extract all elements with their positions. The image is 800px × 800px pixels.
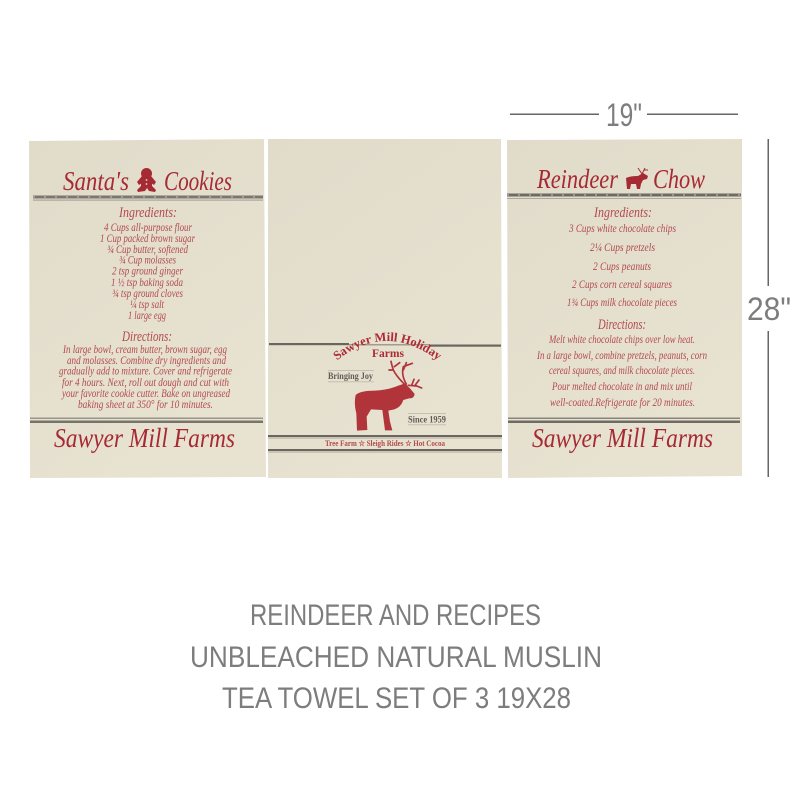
text: ingredients list: 3 Cups white chocolate chips — [568, 221, 676, 235]
text: ingredients list: 2 Cups peanuts — [593, 259, 651, 273]
text: ingredients list: ¾ tsp ground cloves — [112, 288, 183, 300]
title: product name: UNBLEACHED NATURAL MUSLIN — [190, 641, 602, 674]
text: directions: In large bowl, cream butter, brown sugar, egg — [62, 344, 227, 356]
text: directions: for 4 hours. Next, roll out dough and cut with — [62, 377, 229, 389]
panel: Reindeer Chow towel — [507, 139, 742, 478]
text: ingredients list: 2 Cups corn cereal squares — [572, 277, 672, 291]
heading: Reindeer Chow — [536, 164, 705, 194]
icon: gingerbread man — [137, 168, 156, 192]
dimension: height 28 inches: 28" — [747, 291, 791, 327]
title: product name: REINDEER AND RECIPES — [250, 599, 541, 632]
text: directions: and molasses. Combine dry ingredients and — [67, 355, 226, 367]
heading: Santa's Cookies: Santa's — [63, 166, 129, 196]
icon: small reindeer — [626, 168, 648, 189]
heading: Santa's Cookies: Cookies — [164, 166, 232, 196]
stripes: upper band — [269, 343, 501, 347]
text: ingredients list: 2 tsp ground ginger — [112, 266, 183, 278]
stripes: lower bands — [268, 435, 502, 452]
panel: reindeer towel — [268, 139, 502, 478]
stripes: bottom woven band — [30, 418, 263, 423]
text: directions: well-coated.Refrigerate for 20 minutes. — [550, 395, 695, 409]
text: directions: In a large bowl, combine pretzels, peanuts, corn — [536, 348, 707, 362]
dimension: width 19 inches: 19" — [606, 97, 642, 133]
stripes: top woven band — [507, 194, 741, 199]
text: Sawyer Mill Farms: Sawyer Mill Farms — [54, 423, 235, 453]
text: ingredients list: Ingredients: — [118, 205, 177, 221]
text: Sawyer Mill Farms: Sawyer Mill Farms — [532, 423, 713, 453]
text: ingredients list: 1 large egg — [128, 310, 166, 322]
text: ingredients list: ¼ tsp salt — [130, 299, 165, 311]
text: directions: cereal squares, and milk chocolate pieces. — [549, 363, 695, 377]
text: directions — [536, 317, 707, 409]
title: product name: TEA TOWEL SET OF 3 19X28 — [222, 682, 571, 715]
panel: Santa's Cookies towel — [29, 139, 266, 478]
text: directions: Directions: — [597, 317, 646, 333]
text: ingredients list: 1 Cup packed brown sugar — [100, 233, 195, 245]
text: directions — [59, 329, 232, 411]
text: directions: your favorite cookie cutter. Bake on ungreased — [61, 388, 230, 400]
text: ingredients list: ¾ Cup butter, softened — [107, 244, 188, 256]
heading: Reindeer Chow: Reindeer — [536, 164, 618, 194]
text: directions: Pour melted chocolate in and mix until — [551, 379, 692, 393]
text: ingredients list — [567, 205, 677, 309]
text: directions: Directions: — [121, 329, 172, 345]
text: ingredients list — [100, 205, 195, 322]
text: directions: baking sheet at 350° for 10 minutes. — [78, 399, 213, 411]
icon: reindeer silhouette — [355, 361, 422, 431]
title: product name — [190, 599, 602, 715]
stripes: bottom woven band — [508, 418, 740, 423]
text: directions: Melt white chocolate chips over low heat. — [548, 332, 695, 346]
text: ingredients list: 2¼ Cups pretzels — [590, 240, 655, 254]
text: ingredients list: 1¾ Cups milk chocolate pieces — [567, 295, 677, 309]
stripes: top woven band — [33, 196, 263, 201]
text: ingredients list: ¾ Cup molasses — [119, 254, 176, 266]
text: ingredients list: 1 ½ tsp baking soda — [111, 277, 183, 289]
text: Tree Farm, Sleigh Rides, Hot Cocoa: Tree Farm ☆ Sleigh Rides ☆ Hot Cocoa — [325, 439, 445, 448]
text: Sawyer Mill Holiday Farms: Farms — [372, 346, 404, 360]
text: Sawyer Mill Holiday Farms: Sawyer Mill Holiday — [334, 332, 442, 360]
heading: Reindeer Chow: Chow — [653, 164, 705, 194]
text: ingredients list: Ingredients: — [593, 205, 652, 221]
text: directions: gradually add to mixture. Cover and refrigerate — [59, 366, 232, 378]
text: ingredients list: 4 Cups all-purpose flour — [104, 222, 192, 234]
heading: Santa's Cookies — [63, 166, 232, 196]
label: Bringing Joy: Bringing Joy — [328, 371, 373, 381]
label: Since 1959: Since 1959 — [408, 414, 446, 424]
